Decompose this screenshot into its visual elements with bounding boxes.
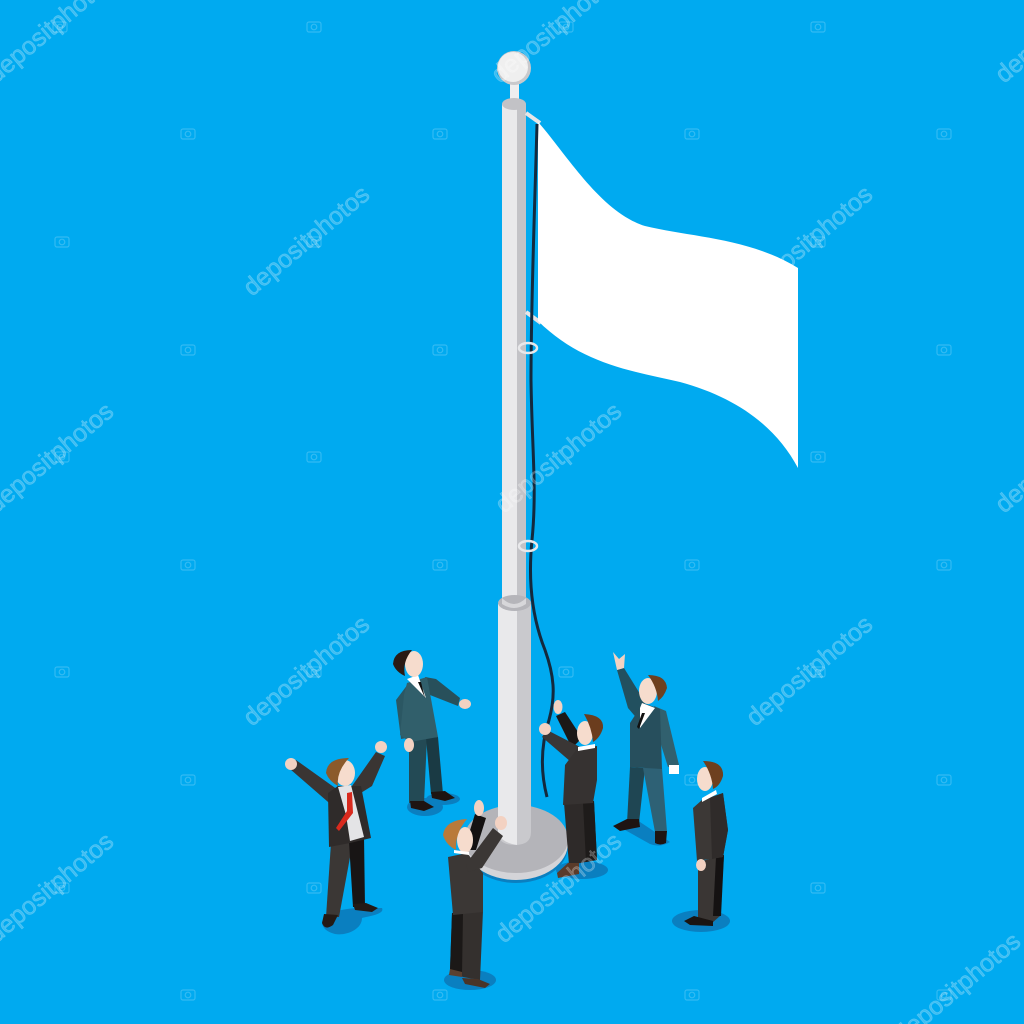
head: [457, 827, 473, 853]
shoes: [557, 863, 579, 878]
shoes: [613, 819, 667, 844]
flagpole: [497, 51, 531, 845]
arms: [425, 677, 460, 706]
lower arm: [466, 828, 503, 872]
jacket: [693, 793, 728, 861]
jacket: [400, 677, 438, 742]
flagpole base: [464, 805, 568, 883]
shoes: [684, 916, 713, 926]
jacket: [563, 746, 597, 805]
head: [639, 678, 657, 704]
lowered arm: [654, 706, 679, 767]
raised arm: [556, 712, 582, 748]
legs: [450, 911, 483, 980]
raised arm: [617, 668, 645, 722]
depositphotos watermarks: depositphotos: [238, 180, 375, 302]
depositphotos watermarks: depositphotos: [741, 180, 878, 302]
hands: [285, 758, 297, 770]
legs: [698, 855, 724, 923]
raised arm: [464, 814, 486, 850]
flag clips: [526, 113, 541, 323]
hands: [474, 800, 484, 816]
collar and tie: [640, 703, 655, 728]
person: pulling rope: [539, 700, 608, 879]
legs: [564, 801, 597, 865]
jacket: [448, 853, 483, 915]
person: dark suit at right, viewed from back: [672, 761, 730, 932]
shadow: [672, 910, 730, 932]
shirt: [338, 785, 364, 841]
shoes: [410, 791, 455, 811]
hands: [613, 652, 625, 670]
depositphotos watermarks: depositphotos: [238, 610, 375, 732]
tie: [336, 792, 353, 831]
pole finial ball: [497, 51, 531, 104]
head: [577, 721, 593, 745]
head: [405, 651, 423, 677]
legs: [627, 767, 645, 823]
hands: [459, 699, 471, 709]
white flag cloth: [538, 122, 798, 468]
collar and tie: [407, 675, 426, 698]
jacket: [630, 703, 662, 769]
person: teal suit pointing at pole: [393, 650, 471, 816]
shoes: [322, 903, 378, 928]
legs: [326, 841, 353, 917]
person: red tie: [285, 741, 387, 934]
depositphotos watermarks: depositphotos: [490, 827, 627, 949]
jacket: [328, 786, 371, 847]
hands: [539, 723, 551, 735]
arms: [290, 752, 385, 808]
shadow: [322, 908, 382, 934]
hand: [696, 859, 706, 871]
person: front, hands raised: [443, 800, 507, 990]
head: [697, 767, 713, 791]
legs: [409, 738, 427, 803]
shoes: [449, 969, 462, 977]
shadow: [625, 822, 670, 846]
shadow: [556, 861, 608, 879]
flag rope: [530, 124, 553, 797]
shadow: [407, 798, 443, 816]
collar: [702, 790, 717, 802]
flag: [519, 113, 798, 797]
depositphotos watermarks: depositphotos: [741, 610, 878, 732]
shadow: [444, 970, 496, 990]
head: [335, 760, 355, 786]
lower pole shaft: [498, 595, 531, 845]
depositphotos watermarks: depositphotos: [490, 397, 627, 519]
rope rings: [519, 343, 537, 551]
lower arm: [542, 730, 582, 768]
upper pole shaft: [502, 98, 526, 601]
person: teal suit arm raised: [613, 652, 679, 846]
